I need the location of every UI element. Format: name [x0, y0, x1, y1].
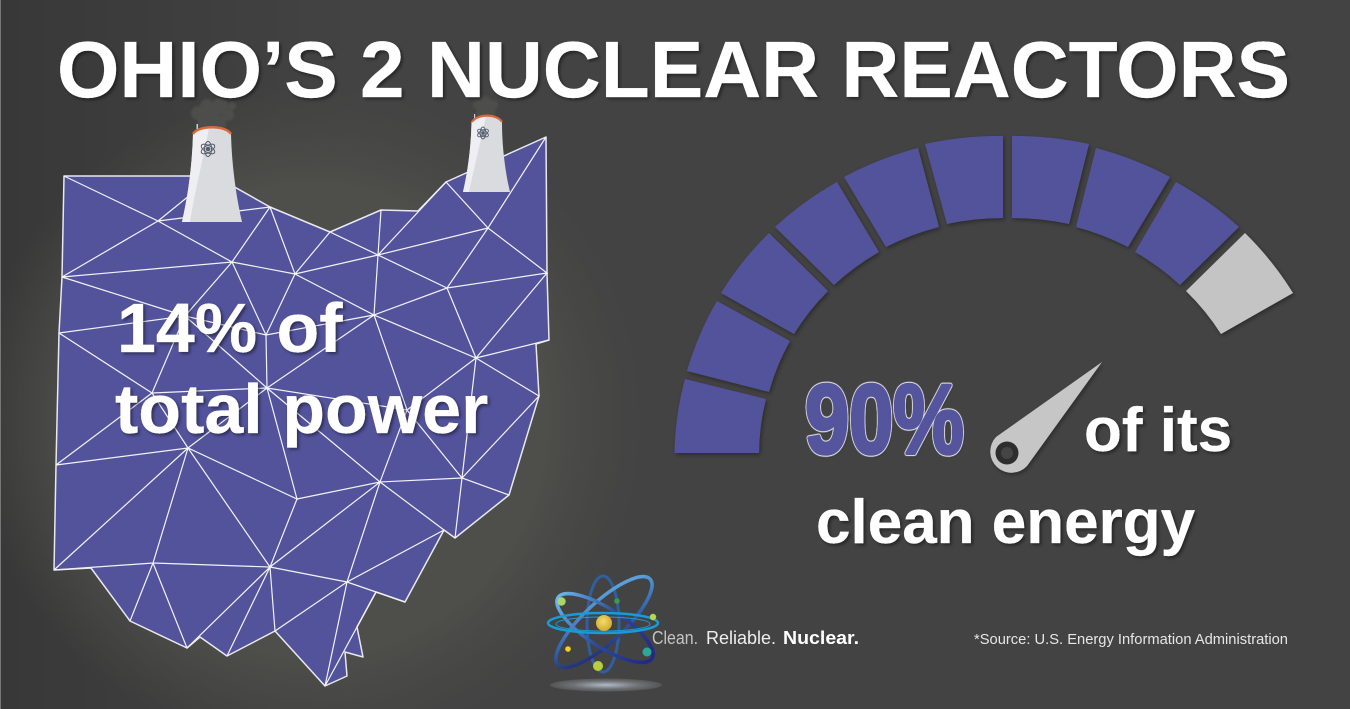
nucleus [596, 615, 612, 631]
title: OHIO’S 2 NUCLEAR REACTORS [57, 25, 1290, 114]
gauge segments: filled [674, 136, 1239, 453]
orbits [544, 564, 664, 680]
electrons [557, 597, 566, 606]
smoke [191, 98, 236, 128]
map fill [54, 137, 549, 686]
gauge [674, 136, 1293, 453]
logo tagline [652, 628, 859, 648]
logo: atom [544, 564, 664, 692]
stat: 90%: 90% [805, 364, 964, 474]
logo tagline: Reliable. [706, 628, 776, 648]
label: of its: of its [1084, 396, 1232, 465]
atom mark [200, 142, 216, 156]
stat: 14% of total power: 14% of [117, 289, 343, 367]
source note: *Source: U.S. Energy Information Administration [974, 631, 1288, 648]
logo shadow [550, 678, 662, 692]
cooling tower: large [182, 98, 242, 222]
logo tagline: Clean. [652, 628, 698, 648]
stat: 14% of total power: total power [115, 370, 488, 448]
stat: 14% of total power [115, 289, 488, 448]
gauge needle [990, 362, 1102, 473]
cooling tower: small [463, 96, 510, 192]
gauge segment: remaining [1186, 233, 1293, 334]
map of Ohio with triangulated mesh [54, 137, 549, 686]
map mesh lines [54, 137, 549, 686]
tower body [182, 127, 242, 222]
logo tagline: Nuclear. [783, 628, 859, 648]
tower body [463, 115, 510, 192]
label: clean energy: clean energy [816, 488, 1196, 557]
smoke [473, 96, 498, 117]
atom mark [476, 127, 490, 139]
